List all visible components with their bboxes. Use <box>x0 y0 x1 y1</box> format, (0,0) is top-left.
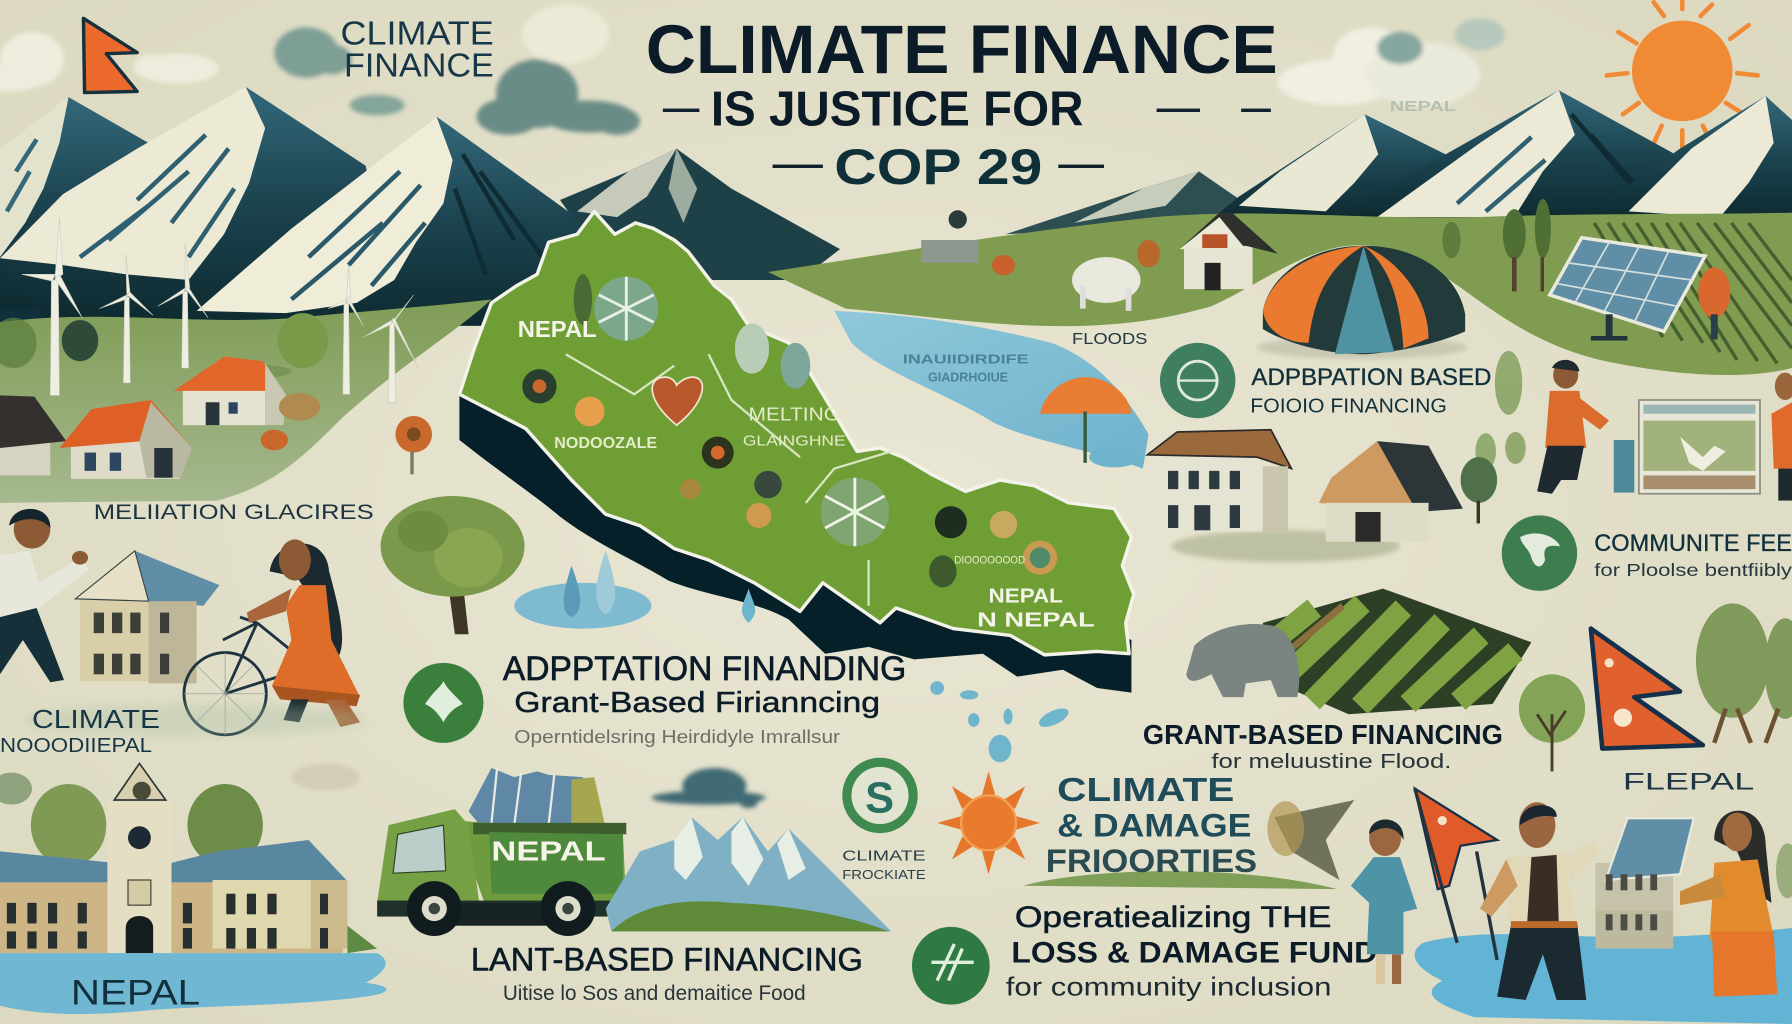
title: CLIMATE FINANCE <box>646 11 1278 88</box>
title: IS JUSTICE FOR <box>711 83 1083 137</box>
operationalizing label: for community inclusion <box>1006 971 1331 1001</box>
man left <box>0 509 89 682</box>
parasol <box>1040 377 1139 467</box>
small sun icon <box>937 771 1040 874</box>
small heading: climate finance: CLIMATE <box>341 16 494 53</box>
flag: right <box>1591 629 1703 749</box>
mountains: left range <box>0 87 646 326</box>
woman in water <box>1680 811 1777 997</box>
grant-based label right: for meluustine Flood. <box>1211 750 1451 773</box>
river label: GIADRHOIUE <box>928 371 1008 385</box>
map: Nepal: MELTING <box>749 404 840 425</box>
bottom left water <box>0 953 386 1014</box>
broken star kite <box>1267 800 1354 880</box>
back mountain centre <box>560 149 840 280</box>
climate damage priorities <box>1023 772 1337 889</box>
bottom left campus <box>0 763 377 953</box>
lant-based financing label: Uitise lo Sos and demaitice Food <box>503 980 806 1005</box>
wind turbines <box>22 217 418 402</box>
sun <box>1607 0 1758 153</box>
vineyard rows and orchard <box>1442 199 1792 363</box>
left green valley <box>0 299 491 503</box>
clouds: top right <box>1278 18 1505 106</box>
houses: centre right <box>1147 430 1497 562</box>
small heading: climate finance: FINANCE <box>344 48 494 85</box>
small clouds <box>651 768 766 808</box>
woman with bicycle <box>247 539 360 727</box>
trees right <box>1519 603 1792 796</box>
sheep <box>1072 240 1160 311</box>
title <box>646 11 1278 195</box>
climate nepal label left <box>0 704 160 757</box>
label: floods: FLOODS <box>1072 331 1147 348</box>
operationalizing label <box>912 901 1377 1005</box>
field with hippo <box>1186 589 1531 714</box>
climate dollar badge <box>842 758 926 882</box>
map: Nepal: DIOOOOOOOD <box>954 554 1025 566</box>
operationalizing label: LOSS & DAMAGE FUND <box>1011 936 1377 969</box>
climate dollar badge: FROCKIATE <box>842 868 926 882</box>
adaptation financing label centre: Operntidelsring Heirdidyle Imrallsur <box>514 726 840 747</box>
adaptation label right: FOIOIO FINANCING <box>1250 395 1447 418</box>
house on hill <box>1179 213 1278 290</box>
bottom left water: NEPAL <box>71 973 200 1013</box>
trees right: FLEPAL <box>1623 769 1754 796</box>
map region lines <box>566 354 891 606</box>
climate dollar badge: CLIMATE <box>842 849 926 865</box>
map icons <box>522 274 1057 587</box>
adaptation financing label centre <box>403 650 906 747</box>
adaptation label right <box>1160 343 1491 418</box>
title: COP 29 <box>834 138 1042 195</box>
truck with solar panels <box>377 768 629 936</box>
plant decor <box>1475 351 1526 470</box>
houses: left valley <box>0 357 286 479</box>
glacier water drops <box>514 551 651 629</box>
map labels: NEPAL <box>518 316 597 342</box>
orange shrub <box>1698 267 1730 339</box>
yurt <box>1257 246 1467 359</box>
river <box>834 311 1149 469</box>
flag: top left <box>83 18 137 93</box>
community label <box>1502 515 1792 591</box>
grant-based label right: GRANT-BASED FINANCING <box>1143 719 1503 750</box>
operationalizing label: Operatiealizing THE <box>1015 901 1331 934</box>
water drops under map <box>742 589 1071 762</box>
adaptation financing label centre: ADPPTATION FINANDING <box>503 650 906 688</box>
climate damage priorities: FRIOORTIES <box>1046 843 1257 879</box>
lant-based financing label: LANT-BASED FINANCING <box>471 941 863 977</box>
clouds: top left <box>0 5 640 135</box>
climate damage priorities: & DAMAGE <box>1057 808 1251 844</box>
community label: for Ploolse bentfiibly <box>1594 560 1792 580</box>
climate dollar badge: S <box>865 775 894 823</box>
climate nepal label left: CLIMATE <box>32 704 160 734</box>
river label <box>903 352 1029 385</box>
river label: INAUIIDIRDIFE <box>903 352 1029 366</box>
bicycle <box>184 617 299 735</box>
small heading: climate finance <box>341 16 494 85</box>
community label: COMMUNITE FEE <box>1594 530 1792 557</box>
right edge bush <box>1776 843 1792 898</box>
map: Nepal: NEPAL <box>989 584 1063 607</box>
factory and small items <box>921 210 1015 275</box>
map: Nepal: N NEPAL <box>977 608 1095 631</box>
map: Nepal: NODOOZALE <box>554 435 657 452</box>
truck with solar panels: NEPAL <box>491 836 606 867</box>
melting glaciers label: MELIIATION GLACIRES <box>94 499 374 524</box>
map surface <box>459 211 1134 655</box>
map extrusion <box>459 394 1131 693</box>
girl with kite <box>1351 819 1417 984</box>
lant-based financing label <box>471 941 863 1005</box>
man in water <box>1480 802 1600 1000</box>
map: Nepal <box>459 211 1134 693</box>
adaptation label right: ADPBPATION BASED <box>1251 364 1491 391</box>
people and map board <box>1537 360 1792 501</box>
climate damage priorities: CLIMATE <box>1057 772 1234 809</box>
flood water bottom right <box>1415 928 1792 1024</box>
adaptation financing label centre: Grant-Based Firianncing <box>514 687 880 719</box>
mountains: right range <box>1006 90 1792 234</box>
tree <box>381 496 525 634</box>
right green hills <box>768 213 1792 375</box>
climate nepal label left: NOOODIIEPAL <box>0 734 152 757</box>
faint cloud label: NEPAL <box>1390 99 1456 115</box>
flag held by man <box>1415 789 1497 960</box>
snow mountain beside truck <box>606 817 891 931</box>
schoolhouse with solar roof <box>75 551 219 683</box>
map snowflake badges <box>594 277 889 546</box>
flooded solar building <box>1595 818 1694 949</box>
ground under people <box>23 704 366 736</box>
solar panel <box>1550 238 1705 341</box>
bushes on left valley <box>0 313 328 378</box>
grant-based label right <box>1143 719 1503 773</box>
small crop bundle and round sign <box>261 393 432 474</box>
map: Nepal: GLAINGHNE <box>743 434 846 450</box>
